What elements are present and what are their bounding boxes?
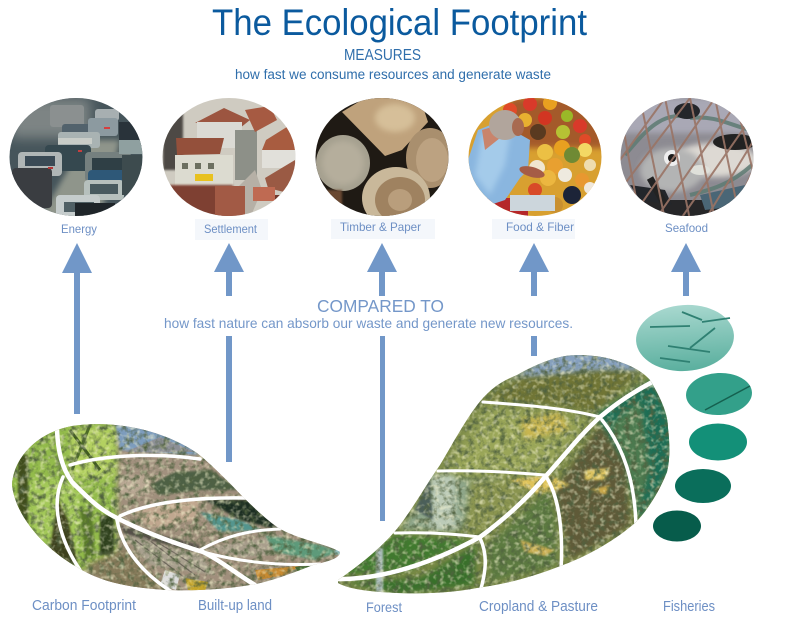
subheading: measures: MEASURES <box>344 47 421 64</box>
leaf veins: heel <box>57 430 320 592</box>
photo circle: timber logs <box>316 98 448 216</box>
toe 1 <box>634 302 736 374</box>
leaf: forefoot, forest and cropland and pasture <box>330 350 675 600</box>
toe 5 <box>653 510 701 542</box>
arrow: timber and paper <box>367 243 397 521</box>
label: forest: Forest <box>366 599 402 615</box>
label: food and fiber: Food & Fiber <box>506 220 574 234</box>
label: carbon footprint: Carbon Footprint <box>32 598 136 614</box>
toe 3 <box>689 424 747 460</box>
label: timber and paper: Timber & Paper <box>340 220 421 234</box>
photo circle: settlement houses <box>162 98 297 219</box>
label: food and fiber <box>492 219 575 239</box>
label: built-up land: Built-up land <box>198 598 272 614</box>
label: energy: Energy <box>61 222 97 236</box>
photo circle: energy traffic <box>9 98 144 218</box>
label: settlement <box>195 219 268 240</box>
toe 4 <box>675 469 731 503</box>
text: nature absorption: how fast nature can absorb our waste and generate new resources. <box>164 315 573 331</box>
label: fisheries: Fisheries <box>663 599 715 615</box>
label: seafood: Seafood <box>665 221 708 235</box>
photo circle: seafood net <box>620 98 760 220</box>
label: settlement: Settlement <box>204 222 258 236</box>
arrow: settlement <box>214 243 244 462</box>
subheading text: consume resources: how fast we consume resources and generate waste <box>235 67 551 82</box>
heading: compared to: COMPARED TO <box>317 296 444 316</box>
arrow: energy <box>62 243 92 414</box>
toe 2 <box>685 371 753 417</box>
leaf veins: forefoot <box>336 378 660 592</box>
arrow: seafood <box>671 243 701 296</box>
leaf: heel, carbon footprint and built-up land <box>12 424 340 590</box>
label: timber and paper <box>331 219 435 239</box>
title: The Ecological Footprint <box>212 2 588 43</box>
arrow: food and fiber <box>519 243 549 356</box>
photo circle: food market <box>468 96 605 222</box>
label: cropland and pasture: Cropland & Pasture <box>479 599 598 615</box>
